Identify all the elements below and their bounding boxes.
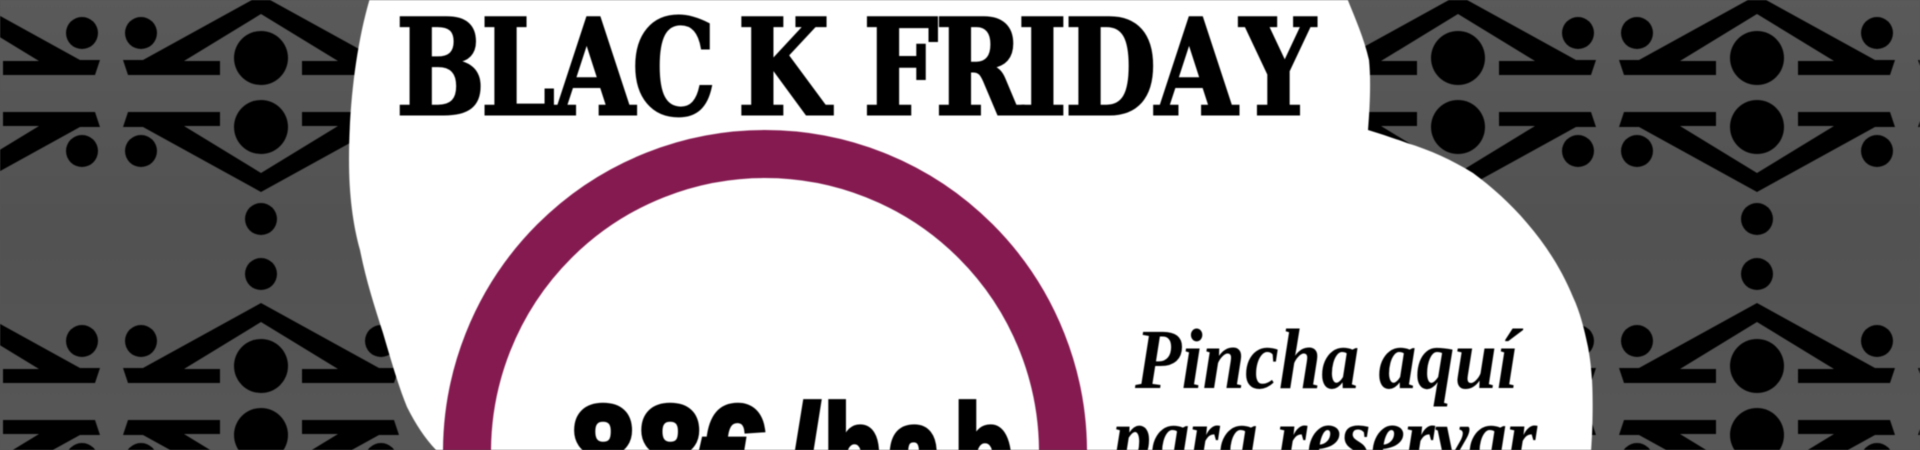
purple ring <box>467 154 1063 450</box>
price <box>571 378 1013 450</box>
white cloud panel <box>349 0 1593 450</box>
line one: Pincha aquí <box>1134 311 1523 407</box>
call to action <box>1107 311 1538 450</box>
